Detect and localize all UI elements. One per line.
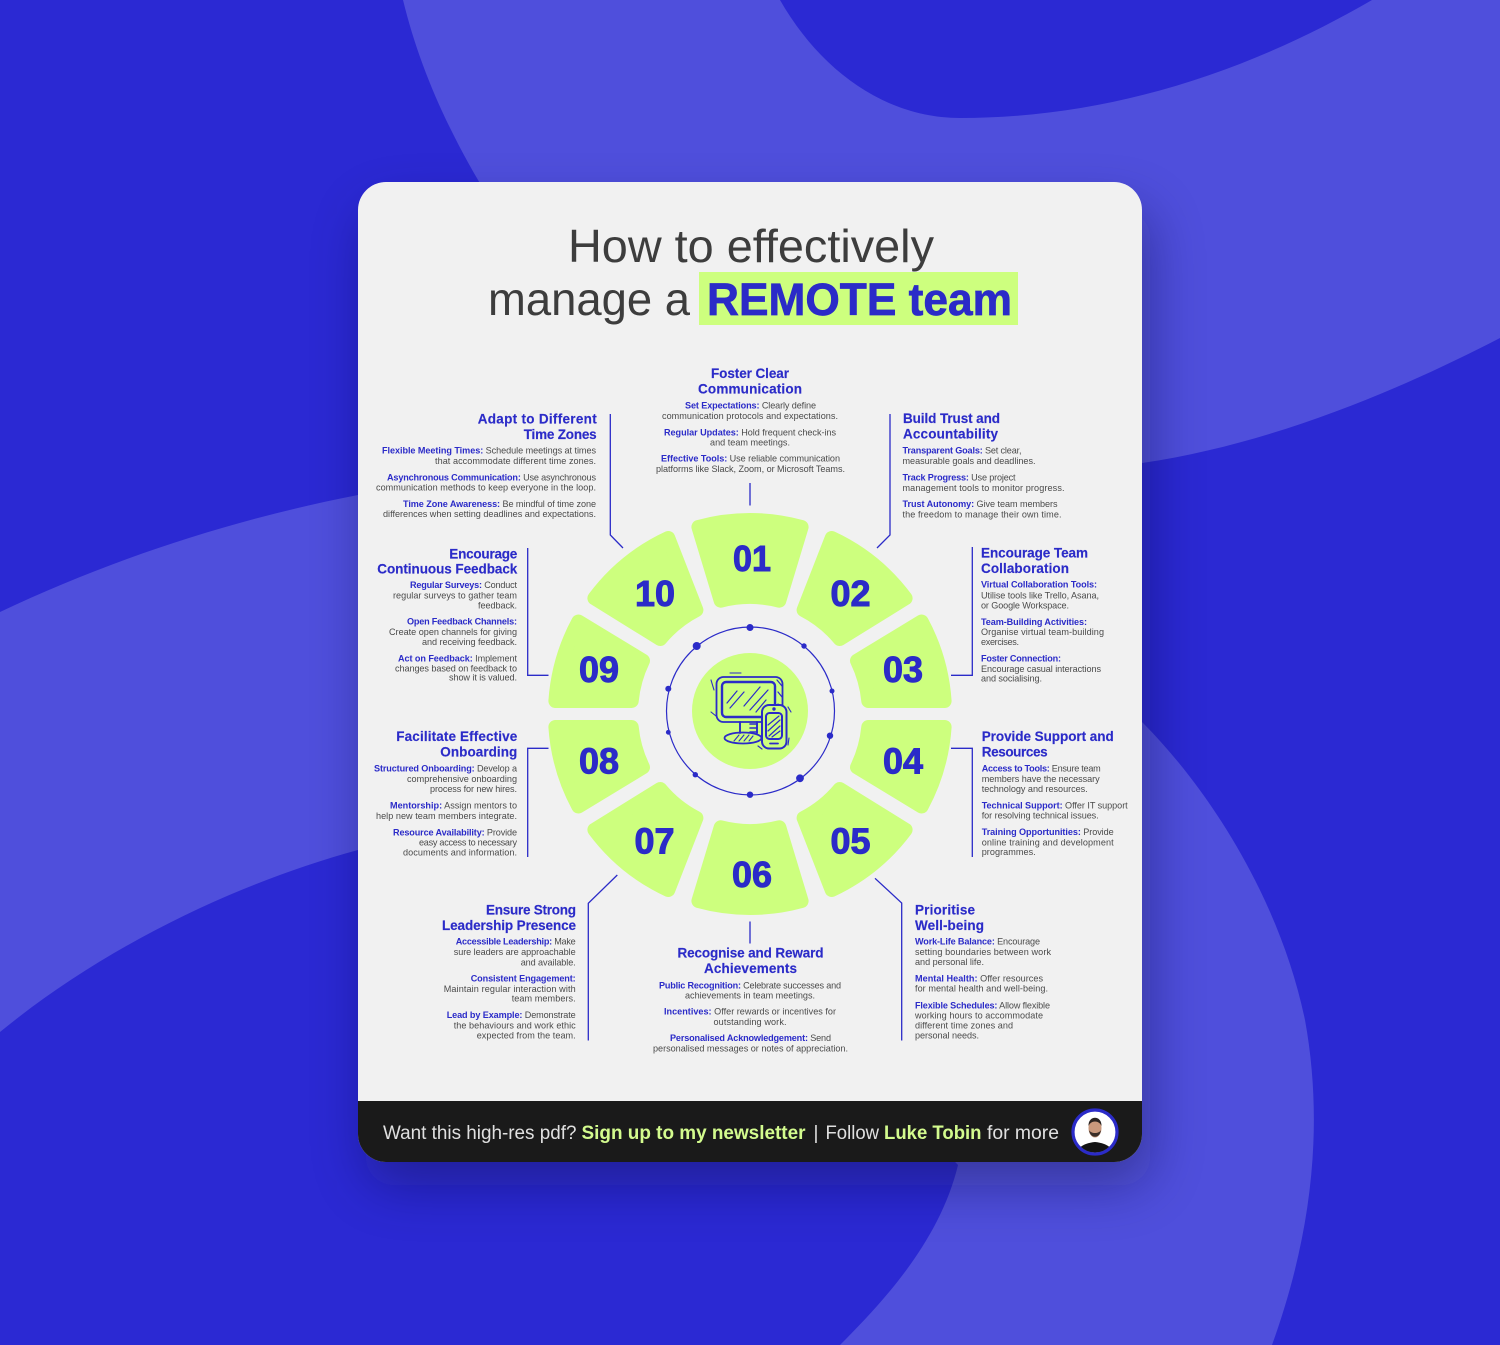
point: Track Progress <box>902 472 1064 493</box>
heading: Accountability <box>903 427 998 442</box>
point: Flexible Meeting Times: Flexible Meeting Times: Schedule meetings at times <box>382 446 596 456</box>
point: Set Expectations <box>662 400 838 421</box>
point: Public Recognition: achievements in team meetings. <box>685 991 815 1001</box>
point: Resource Availability <box>393 827 517 857</box>
footer call to action <box>383 1123 1059 1144</box>
heading <box>698 366 802 396</box>
point: Lead by Example: Lead by Example: Demonstrate <box>447 1010 576 1020</box>
point: Personalised Acknowledgement: Personalised Acknowledgement: Send <box>670 1033 831 1043</box>
heading: Recognise and Reward <box>678 946 824 960</box>
point: Act on Feedback <box>395 654 517 683</box>
point: Accessible Leadership: and available. <box>521 957 576 967</box>
point: Flexible Schedules: Flexible Schedules: Allow flexible <box>915 1000 1050 1010</box>
heading: Encourage <box>449 546 518 561</box>
point: Transparent Goals: Transparent Goals: Set clear, <box>902 446 1022 456</box>
point: Regular Updates: Regular Updates: Hold frequent check-ins <box>664 428 836 438</box>
point: Accessible Leadership: sure leaders are approachable <box>454 947 576 957</box>
point: Mental Health <box>915 974 1048 994</box>
point: Flexible Meeting Times: that accommodate different time zones. <box>435 456 596 466</box>
point: Resource Availability: documents and information. <box>403 847 517 857</box>
heading: Ensure Strong <box>486 902 576 917</box>
point: Mentorship: help new team members integrate. <box>376 811 517 821</box>
heading: Collaboration <box>981 561 1069 576</box>
heading <box>678 946 824 976</box>
point: Open Feedback Channels <box>389 617 517 647</box>
heading: Encourage Team <box>981 546 1088 561</box>
point: Training Opportunities: online training and development <box>982 837 1114 847</box>
heading <box>442 902 576 933</box>
point: Flexible Schedules: different time zones and <box>915 1020 1013 1030</box>
point: Team-Building Activities: Team-Building Activities: <box>981 617 1087 627</box>
point: Time Zone Awareness: differences when setting deadlines and expectations. <box>383 509 596 519</box>
point: Consistent Engagement <box>444 974 576 1004</box>
point: Asynchronous Communication: Asynchronous Communication: Use asynchronous <box>387 472 596 482</box>
segment numbers: 07 <box>634 820 674 862</box>
point: Structured Onboarding <box>374 764 518 794</box>
segment numbers <box>579 538 923 895</box>
point: Track Progress: Track Progress: Use project <box>902 472 1016 482</box>
segment numbers: 05 <box>830 820 870 862</box>
point: Flexible Schedules <box>914 1000 1050 1040</box>
point: Structured Onboarding: process for new hires. <box>430 784 517 794</box>
footer call to action: | <box>814 1123 818 1144</box>
segment 04 <box>857 727 945 806</box>
block 04: Provide Support and Resources <box>982 729 1128 857</box>
point: Lead by Example: the behaviours and work ethic <box>454 1020 576 1030</box>
point: Open Feedback Channels: and receiving feedback. <box>422 637 517 647</box>
point: Flexible Schedules: working hours to accommodate <box>914 1010 1043 1020</box>
block 08: Facilitate Effective Onboarding <box>374 729 518 857</box>
point: Asynchronous Communication <box>376 472 596 493</box>
point: Act on Feedback: Act on Feedback: Implement <box>398 654 517 664</box>
block 02: Build Trust and Accountability <box>902 411 1064 520</box>
point: Personalised Acknowledgement <box>653 1033 848 1054</box>
point: Structured Onboarding: Structured Onboarding: Develop a <box>374 764 518 774</box>
point: Act on Feedback: show it is valued. <box>449 673 517 683</box>
point: Regular Updates <box>664 428 836 448</box>
point: Regular Surveys: regular surveys to gather team <box>393 590 517 600</box>
segment 02 <box>804 538 906 639</box>
heading <box>981 546 1088 576</box>
segment 01 <box>698 520 802 601</box>
card panel <box>358 182 1142 1162</box>
heading: Resources <box>982 745 1048 760</box>
point: Work-Life Balance: and personal life. <box>915 957 984 967</box>
segment numbers: 08 <box>579 740 619 782</box>
segment 08 <box>555 727 643 806</box>
heading <box>982 729 1114 760</box>
point: Mentorship <box>376 800 517 821</box>
point: Effective Tools: platforms like Slack, Zoom, or Microsoft Teams. <box>656 464 845 474</box>
point: Incentives: outstanding work. <box>714 1017 786 1027</box>
point: Access to Tools <box>982 764 1101 794</box>
segment numbers: 01 <box>733 538 771 579</box>
segment numbers: 03 <box>883 649 923 690</box>
block 01: Foster Clear Communication <box>656 366 845 474</box>
heading: Adapt to Different <box>478 411 597 426</box>
point: Trust Autonomy: the freedom to manage their own time. <box>902 510 1062 520</box>
heading <box>915 902 984 933</box>
point: Work-Life Balance <box>915 937 1051 967</box>
segment numbers: 10 <box>635 573 675 614</box>
heading: Provide Support and <box>982 729 1114 744</box>
heading: Build Trust and <box>903 411 1000 426</box>
point: Team-Building Activities <box>981 617 1104 647</box>
point: Technical Support: for resolving technical issues. <box>982 811 1099 821</box>
point: Foster Connection: and socialising. <box>981 674 1042 684</box>
title: How to effectively <box>568 220 934 272</box>
point: Access to Tools: members have the necessary <box>982 774 1100 784</box>
point: Regular Surveys: Regular Surveys: Conduct <box>410 580 517 590</box>
point: Virtual Collaboration Tools <box>981 580 1099 610</box>
point: Regular Updates: and team meetings. <box>710 438 790 448</box>
footer call to action: Want this high-res pdf? <box>383 1123 576 1144</box>
point: Asynchronous Communication: communication methods to keep everyone in the loop. <box>376 483 596 493</box>
point: Training Opportunities: programmes. <box>982 847 1036 857</box>
point: Public Recognition: Public Recognition: Celebrate successes and <box>659 980 841 990</box>
point: Set Expectations: communication protocols and expectations. <box>662 411 838 421</box>
point: Resource Availability: easy access to necessary <box>419 838 517 848</box>
point: Consistent Engagement: Consistent Engagement: <box>471 974 576 984</box>
heading: Facilitate Effective <box>396 729 518 744</box>
point: Team-Building Activities: Organise virtual team-building <box>981 627 1104 637</box>
footer call to action: Sign up to my newsletter <box>582 1123 806 1144</box>
point: Time Zone Awareness <box>383 499 596 519</box>
point: Team-Building Activities: exercises. <box>981 637 1019 647</box>
point: Flexible Schedules: personal needs. <box>915 1030 979 1040</box>
title <box>488 220 1018 325</box>
point: Incentives <box>664 1007 836 1027</box>
heading: Achievements <box>704 961 797 976</box>
heading <box>478 411 597 442</box>
point: Training Opportunities: Training Opportunities: Provide <box>982 827 1114 837</box>
point: Transparent Goals: measurable goals and deadlines. <box>902 456 1036 466</box>
footer avatar <box>1073 1110 1117 1156</box>
title: manage a <box>488 273 690 325</box>
segment 10 <box>594 538 696 639</box>
heading <box>396 729 518 760</box>
point: Work-Life Balance: setting boundaries between work <box>915 947 1051 957</box>
point: Technical Support <box>982 800 1128 821</box>
title: REMOTE team <box>707 274 1012 325</box>
point: Accessible Leadership <box>454 937 576 967</box>
point: Flexible Meeting Times <box>382 446 596 466</box>
centre circle <box>692 653 808 769</box>
point: Personalised Acknowledgement: personalised messages or notes of appreciation. <box>653 1044 848 1054</box>
segment 09 <box>555 622 643 701</box>
heading: Communication <box>698 382 802 396</box>
point: Lead by Example: expected from the team. <box>477 1030 576 1040</box>
point: Foster Connection: Encourage casual interactions <box>981 664 1101 674</box>
point: Virtual Collaboration Tools: or Google Workspace. <box>981 600 1069 610</box>
point: Virtual Collaboration Tools: Utilise tools like Trello, Asana, <box>981 590 1099 600</box>
segment numbers: 02 <box>830 573 870 614</box>
point: Virtual Collaboration Tools: Virtual Collaboration Tools: <box>981 580 1097 590</box>
footer call to action: Follow <box>826 1123 879 1144</box>
point: Track Progress: management tools to monitor progress. <box>902 483 1064 493</box>
point: Trust Autonomy: Trust Autonomy: Give team members <box>902 499 1058 509</box>
point: Training Opportunities <box>982 827 1114 857</box>
segment 03 <box>857 622 945 701</box>
point: Mentorship: Mentorship: Assign mentors to <box>390 800 517 810</box>
centre ring with dots <box>665 624 834 798</box>
point: Set Expectations: Set Expectations: Clearly define <box>685 400 816 410</box>
connector lines <box>528 414 972 1040</box>
point: Resource Availability: Resource Availability: Provide <box>393 827 517 837</box>
heading: Onboarding <box>440 745 517 760</box>
heading: Foster Clear <box>711 366 790 381</box>
segment numbers: 04 <box>883 740 923 782</box>
block 05: Prioritise Well-being <box>914 902 1051 1040</box>
heading <box>377 546 518 576</box>
point: Open Feedback Channels: Open Feedback Channels: <box>407 617 517 627</box>
point: Public Recognition <box>659 980 841 1001</box>
point: Act on Feedback: changes based on feedback to <box>395 664 517 674</box>
point: Mental Health: for mental health and well-being. <box>915 984 1048 994</box>
point: Access to Tools: Access to Tools: Ensure team <box>982 764 1101 774</box>
heading <box>903 411 1000 442</box>
point: Regular Surveys <box>393 580 517 610</box>
footer call to action: for more <box>987 1123 1059 1144</box>
point: Structured Onboarding: comprehensive onboarding <box>407 774 517 784</box>
point: Consistent Engagement: Maintain regular interaction with <box>444 984 576 994</box>
point: Foster Connection: Foster Connection: <box>981 654 1061 664</box>
point: Trust Autonomy <box>902 499 1062 520</box>
point: Mental Health: Mental Health: Offer resources <box>915 974 1043 984</box>
heading: Time Zones <box>524 427 597 442</box>
point: Lead by Example <box>447 1010 576 1040</box>
block 03: Encourage Team Collaboration <box>981 546 1104 684</box>
card shadow <box>366 210 1150 1185</box>
block 07: Ensure Strong Leadership Presence <box>442 902 576 1040</box>
point: Consistent Engagement: team members. <box>512 994 576 1004</box>
block 10: Adapt to Different Time Zones <box>376 411 597 519</box>
point: Effective Tools: Effective Tools: Use reliable communication <box>661 454 840 464</box>
point: Foster Connection <box>981 654 1101 684</box>
point: Effective Tools <box>656 454 845 474</box>
heading: Prioritise <box>915 902 975 917</box>
point: Regular Surveys: feedback. <box>478 600 517 610</box>
segment 06 <box>698 827 802 908</box>
point: Open Feedback Channels: Create open channels for giving <box>389 627 517 637</box>
heading: Continuous Feedback <box>377 561 518 576</box>
icon: monitor and phone <box>711 673 791 749</box>
segment 07 <box>594 789 696 890</box>
point: Transparent Goals <box>902 446 1036 466</box>
point: Incentives: Incentives: Offer rewards or incentives for <box>664 1007 836 1017</box>
block 06: Recognise and Reward Achievements <box>653 946 848 1054</box>
point: Access to Tools: technology and resources. <box>982 784 1088 794</box>
footer call to action: Luke Tobin <box>884 1123 982 1144</box>
point: Time Zone Awareness: Time Zone Awareness: Be mindful of time zone <box>403 499 596 509</box>
segment numbers: 09 <box>579 649 619 690</box>
heading: Leadership Presence <box>442 918 576 933</box>
point: Accessible Leadership: Accessible Leadership: Make <box>456 937 576 947</box>
block 09: Encourage Continuous Feedback <box>377 546 518 683</box>
point: Work-Life Balance: Work-Life Balance: Encourage <box>915 937 1040 947</box>
segment numbers: 06 <box>732 854 772 895</box>
point: Technical Support: Technical Support: Offer IT support <box>982 800 1128 810</box>
wheel segments <box>555 520 945 908</box>
heading: Well-being <box>915 918 984 933</box>
segment 05 <box>804 789 906 890</box>
